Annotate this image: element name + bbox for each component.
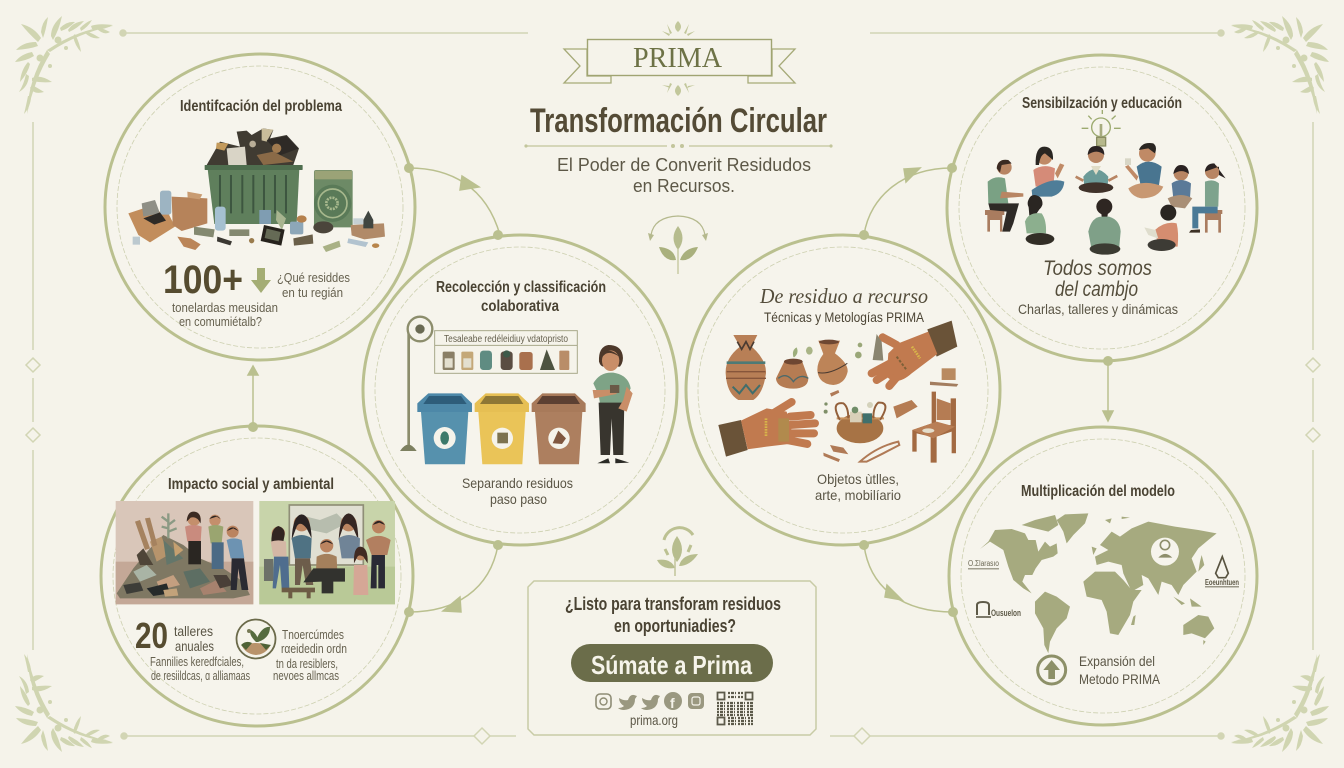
ring <box>101 426 413 726</box>
heading <box>436 279 606 315</box>
heading: colaborativa <box>481 298 559 315</box>
expansion icon <box>1038 656 1066 684</box>
board caption: Tesaleabe redéleidiuy vdatopristo <box>444 334 568 345</box>
question <box>565 594 781 636</box>
caption: Metodo PRIMA <box>1079 671 1161 687</box>
heading: Multiplicación del modelo <box>1021 483 1175 500</box>
illustration: pottery, hands, basket and chair <box>718 321 958 463</box>
families text: de resiildcas, ɑ alliamaas <box>151 669 250 683</box>
panel: identification of the problem <box>105 54 415 360</box>
arrow: collection to impact <box>409 545 498 612</box>
ring <box>363 235 677 545</box>
arrow: multiplication to techniques <box>864 545 953 612</box>
ring <box>105 54 415 360</box>
illustration: group sitting in a circle <box>985 143 1226 255</box>
opportunities text: tn da resiblers, <box>276 657 338 671</box>
button: Súmate a Prima <box>591 650 752 680</box>
caption: arte, mobilíario <box>815 487 901 503</box>
panel: call to action <box>528 581 816 735</box>
social icons <box>596 692 704 711</box>
subtitle <box>557 154 811 196</box>
logo banner: PRIMA: PRIMA <box>633 42 722 74</box>
panel: awareness and education <box>947 55 1257 361</box>
caption: paso paso <box>490 491 547 507</box>
families text <box>150 655 250 683</box>
question text: en tu regián <box>282 286 343 300</box>
ring <box>949 427 1257 725</box>
arrow: impact to problem <box>248 366 258 427</box>
opportunities text: Tnoercúmdes <box>282 628 344 642</box>
partner emblem east <box>1216 557 1228 578</box>
stat label: anuales <box>175 638 214 654</box>
ring <box>686 235 1000 545</box>
arrow: techniques to awareness <box>864 168 952 235</box>
heading: Sensibilzación y educación <box>1022 95 1182 112</box>
illustration: overflowing dumpster and waste <box>128 128 385 252</box>
QR code <box>717 692 753 724</box>
ornament below logo <box>662 83 695 96</box>
social icons: f <box>670 695 675 711</box>
caption: Objetos ùtlles, <box>817 471 899 487</box>
question text <box>277 271 350 300</box>
map marker <box>1151 538 1179 566</box>
ring <box>947 55 1257 361</box>
caption <box>1079 653 1161 687</box>
script message <box>1043 257 1152 301</box>
icon: soil and sprout <box>236 620 276 658</box>
script message: del cambjo <box>1055 278 1138 301</box>
opportunities text: nevoes allmcas <box>273 669 339 683</box>
partner logo: east: Eoeunhtuen <box>1205 578 1239 587</box>
partner logo: west bottom <box>976 602 1021 618</box>
caption <box>462 475 573 507</box>
stat label <box>174 623 214 654</box>
illustration: sign, bins and woman <box>400 317 633 464</box>
website: prima.org <box>630 712 678 728</box>
opportunities text <box>273 628 347 683</box>
illustration: waste pile before <box>116 501 253 604</box>
logo banner: PRIMA <box>564 40 795 83</box>
world map <box>980 513 1228 684</box>
panel: from waste to resource <box>686 235 1000 545</box>
panel: multiplication of the model <box>949 427 1257 725</box>
heading: Recolección y classificación <box>436 279 606 296</box>
illustration: community after <box>259 501 395 604</box>
script message: Todos somos <box>1043 257 1152 280</box>
arrow: problem to collection <box>409 168 500 235</box>
caption: Expansión del <box>1079 653 1155 669</box>
stat caption <box>172 301 278 329</box>
stat caption: tonelardas meusidan <box>172 301 278 315</box>
question: ¿Listo para transforam residuos <box>565 594 781 614</box>
opportunities text: rαeidedin ordn <box>281 642 347 656</box>
heading: Impacto social y ambiental <box>168 476 334 493</box>
stat caption: en comumiétalb? <box>179 315 262 329</box>
icon: sprout with circular arrows <box>648 216 708 274</box>
caption <box>815 471 901 503</box>
box <box>528 581 816 735</box>
subtitle: El Poder de Converit Residudos <box>557 154 811 175</box>
partner logo: west top: O.Ʃlarasıo <box>968 559 999 568</box>
partner logo: west bottom: Ousuelon <box>991 608 1021 618</box>
stat: 20 workshops: 20 <box>135 615 168 656</box>
subtitle: en Recursos. <box>633 175 735 196</box>
icon: down arrow <box>251 268 271 293</box>
caption: Charlas, talleres y dinámicas <box>1018 301 1178 317</box>
script heading: De residuo a recurso <box>759 284 928 308</box>
icon: light bulb <box>1082 110 1121 146</box>
caption: Separando residuos <box>462 475 573 491</box>
button <box>571 644 773 682</box>
icon: sprout above call to action <box>657 528 698 576</box>
stat label: talleres <box>174 623 213 639</box>
question: en oportuniadies? <box>614 616 736 636</box>
arrow: awareness to multiplication <box>1103 360 1113 421</box>
ornament above logo <box>662 21 695 36</box>
subheading: Técnicas y Metologías PRIMA <box>764 309 925 325</box>
heading: Identifcación del problema <box>180 98 342 115</box>
title divider <box>524 144 833 148</box>
question text: ¿Qué residdes <box>277 271 350 285</box>
title: Transformación Circular <box>530 102 827 140</box>
stat: 100+ tonnes: 100+ <box>163 258 243 302</box>
ring connector dots <box>248 163 1113 617</box>
panel: collaborative collection <box>363 235 677 545</box>
families text: Fannilies keredfciales, <box>150 655 244 669</box>
panel: social and environmental impact <box>101 426 413 726</box>
